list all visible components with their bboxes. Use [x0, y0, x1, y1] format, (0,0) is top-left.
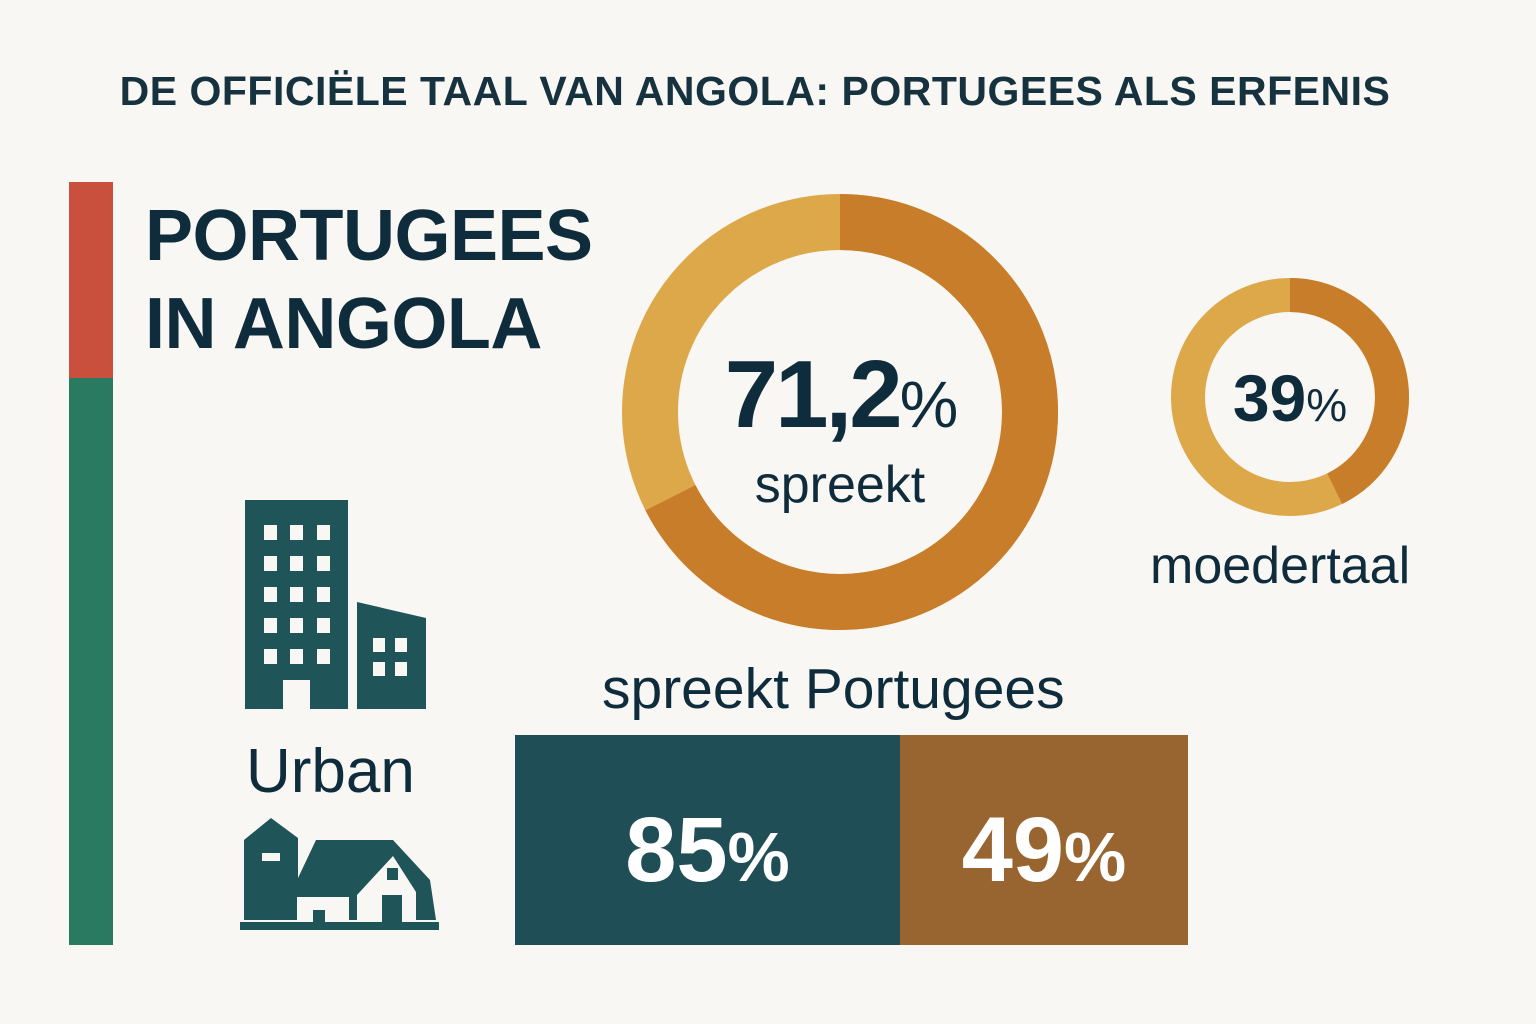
bar: urban vs rural [515, 735, 1188, 945]
rural 49% [900, 735, 1188, 945]
donut chart: 71,2% spreekt [622, 194, 1058, 630]
icon: city buildings [240, 500, 439, 930]
heading: Portugees in Angola: PORTUGEES [145, 196, 593, 276]
label: moedertaal: moedertaal [1150, 537, 1410, 595]
label: Urban: Urban [246, 737, 415, 806]
donut value: 71,2% [725, 341, 955, 448]
urban 85% [515, 735, 900, 945]
heading: Portugees in Angola [145, 196, 593, 364]
donut chart: 39% moedertaal [1171, 278, 1409, 516]
urban 85%: 85% [625, 799, 790, 901]
side bar: flag colors [69, 182, 113, 945]
heading: Portugees in Angola: IN ANGOLA [145, 284, 542, 364]
title: DE OFFICIËLE TAAL VAN ANGOLA: PORTUGEES ALS ERFENIS [120, 68, 1390, 114]
label: spreekt Portugees: spreekt Portugees [602, 657, 1065, 721]
icon: rural farm [238, 818, 439, 930]
rural 49%: 49% [962, 799, 1126, 901]
text: spreekt [755, 456, 925, 514]
small donut value: 39% [1233, 361, 1347, 435]
